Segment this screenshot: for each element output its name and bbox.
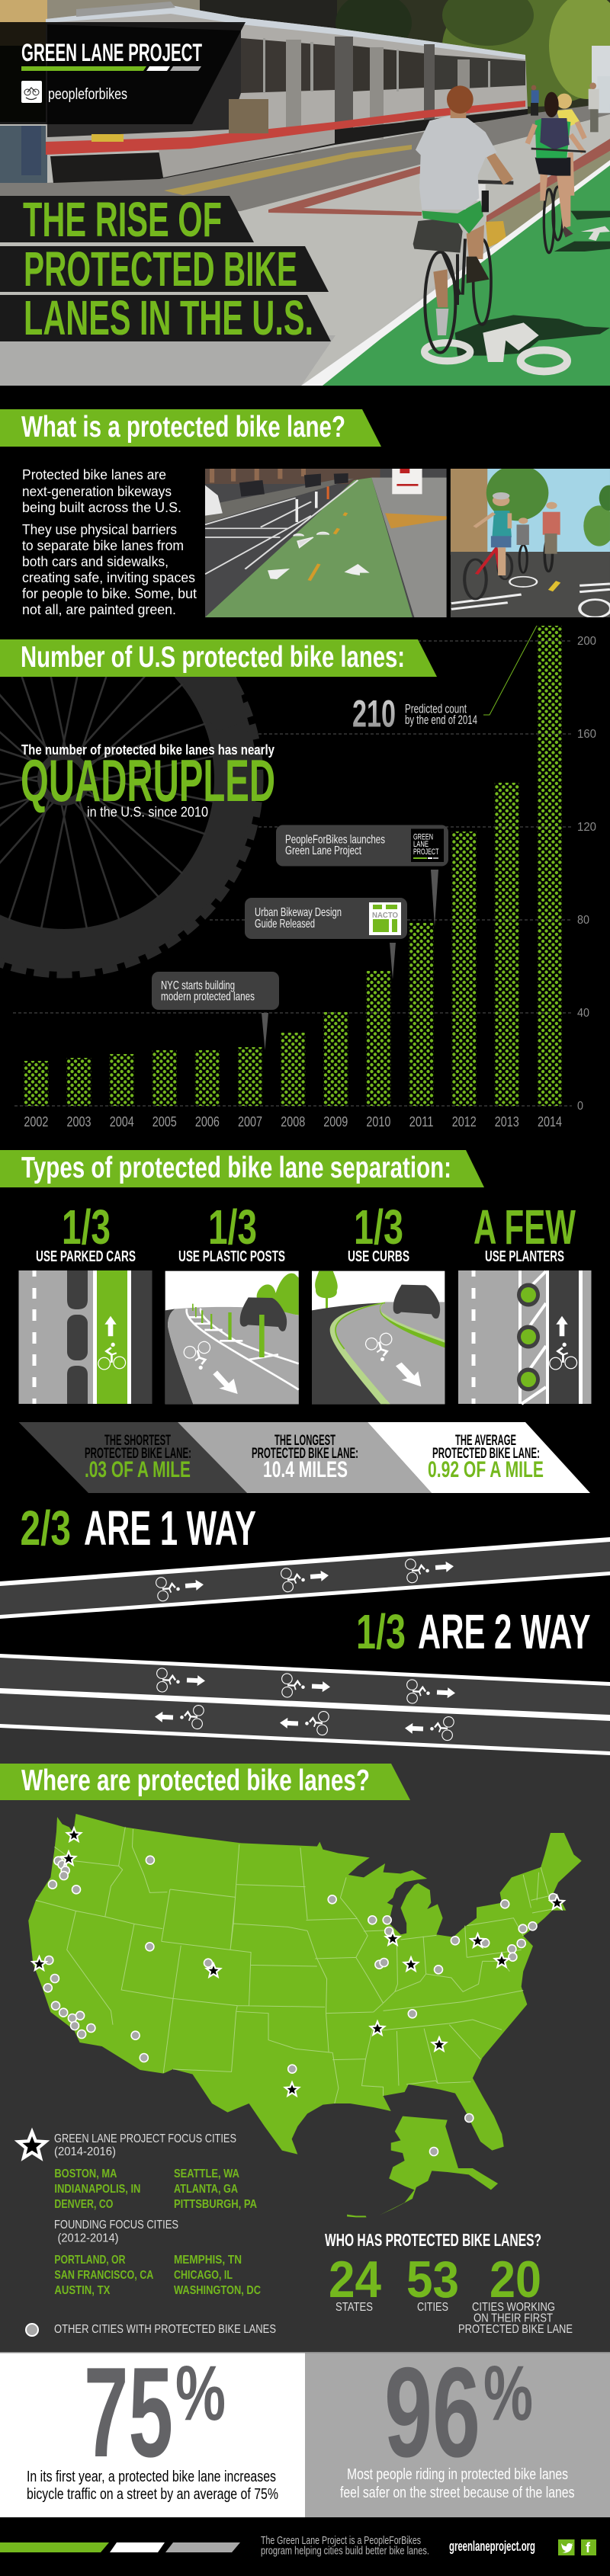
axis labels: 80 bbox=[577, 914, 589, 927]
photo: family riding bbox=[451, 465, 610, 617]
stat: curbs: 1/3 bbox=[354, 1200, 403, 1254]
text block: definition: both cars and sidewalks, bbox=[22, 553, 169, 569]
longest bbox=[178, 1422, 432, 1493]
text block: definition bbox=[22, 466, 197, 617]
stat: 20 cities working: ON THEIR FIRST bbox=[474, 2312, 553, 2324]
icon: Green Lane Project mini logo: PROJECT bbox=[413, 847, 439, 857]
text: quadrupled bbox=[21, 742, 275, 820]
legend heading: 2012-2014: FOUNDING FOCUS CITIES bbox=[54, 2219, 178, 2232]
heading: types of separation: Types of protected bike lane separation: bbox=[21, 1152, 451, 1184]
callout: 210 predicted bbox=[352, 626, 537, 735]
panel: 75 percent: % bbox=[175, 2350, 226, 2437]
callout: Urban Bikeway Design Guide: Urban Bikeway Design bbox=[255, 906, 342, 919]
stat: 20 cities working bbox=[458, 2251, 573, 2336]
stat: 20 cities working: 20 bbox=[490, 2251, 541, 2308]
axis labels: 40 bbox=[577, 1007, 589, 1020]
year labels: 2002 bbox=[24, 1114, 48, 1129]
city list: 2014-2016: BOSTON, MA bbox=[54, 2167, 117, 2180]
city list: 2012-2014: SAN FRANCISCO, CA bbox=[54, 2269, 154, 2282]
shortest: .03 OF A MILE bbox=[85, 1457, 191, 1482]
icon: NACTO logo bbox=[369, 902, 401, 935]
city list: 2012-2014: MEMPHIS, TN bbox=[174, 2254, 242, 2267]
callout: NYC starts building: modern protected lanes bbox=[161, 991, 255, 1003]
stat: plastic posts bbox=[178, 1200, 285, 1265]
callout: Green Lane Project launch bbox=[276, 825, 448, 927]
footer text: program helping cities build better bike lanes. bbox=[261, 2544, 429, 2558]
footer bbox=[0, 2517, 610, 2576]
thin rule above stat panels bbox=[0, 2352, 610, 2353]
panel: 96 percent: 96 bbox=[384, 2341, 480, 2484]
stat: parked cars: 1/3 bbox=[62, 1200, 111, 1254]
stat: 20 cities working: CITIES WORKING bbox=[472, 2301, 555, 2314]
text block: definition: being built across the U.S. bbox=[22, 499, 181, 515]
heading: what is a protected bike lane: What is a protected bike lane? bbox=[21, 411, 345, 444]
icon: NACTO logo: NACTO bbox=[372, 912, 398, 920]
year labels: 2007 bbox=[238, 1114, 262, 1129]
heading: 2/3 are 1 way: 2/3 bbox=[20, 1501, 71, 1556]
shortest: THE SHORTEST bbox=[104, 1433, 171, 1449]
longest: 10.4 MILES bbox=[263, 1457, 348, 1482]
bars bbox=[24, 626, 562, 1106]
icon: PeopleForBikes bbox=[21, 81, 42, 103]
city list: 2012-2014: CHICAGO, IL bbox=[174, 2269, 233, 2282]
text block: definition: creating safe, inviting spaces bbox=[22, 569, 195, 585]
city list: 2014-2016: DENVER, CO bbox=[54, 2198, 113, 2211]
hero photo: light-rail train and cyclists on a green lane bbox=[0, 0, 610, 386]
road: one-way lane bbox=[0, 1537, 610, 1619]
stat: 53 cities: CITIES bbox=[417, 2301, 448, 2314]
title: PROTECTED BIKE bbox=[24, 242, 297, 296]
city list: 2012-2014 bbox=[54, 2254, 261, 2297]
title: LANES IN THE U.S. bbox=[24, 290, 313, 345]
year labels: 2008 bbox=[281, 1114, 305, 1129]
callout: 210 predicted: by the end of 2014 bbox=[405, 713, 477, 727]
stat: 53 cities: 53 bbox=[406, 2251, 459, 2308]
illustration: parked car separation bbox=[18, 1270, 152, 1404]
illustration: curb separation bbox=[312, 1271, 445, 1404]
city list: 2014-2016 bbox=[54, 2167, 257, 2211]
year labels: 2013 bbox=[495, 1114, 519, 1129]
legend heading: 2014-2016 bbox=[54, 2132, 236, 2158]
panel: 75 percent bbox=[0, 2341, 305, 2517]
logo stripe bbox=[21, 66, 201, 71]
state borders bbox=[36, 1827, 552, 2103]
axis labels bbox=[577, 635, 596, 1113]
footer text bbox=[261, 2534, 429, 2558]
heading: 1/3 are 2 way bbox=[356, 1604, 590, 1659]
average bbox=[368, 1422, 590, 1493]
map: United States bbox=[28, 1814, 582, 2217]
stat: curbs: USE CURBS bbox=[348, 1248, 409, 1265]
icon: Green Lane Project mini logo: LANE bbox=[413, 840, 429, 849]
longest: PROTECTED BIKE LANE: bbox=[252, 1446, 358, 1462]
markers: other cities bbox=[43, 1856, 557, 2155]
icon: facebook bbox=[581, 2539, 596, 2555]
stat: 24 states: STATES bbox=[336, 2301, 373, 2314]
far riders bbox=[598, 103, 610, 113]
axis labels: 200 bbox=[577, 635, 596, 648]
contiguous states bbox=[28, 1814, 582, 2155]
illustration: plastic post separation bbox=[165, 1271, 299, 1404]
Alaska bbox=[347, 2116, 498, 2217]
text: quadrupled: in the U.S. since 2010 bbox=[87, 805, 208, 820]
stat: planters: USE PLANTERS bbox=[485, 1248, 564, 1265]
map section background bbox=[0, 1725, 610, 2353]
axis labels: 0 bbox=[577, 1100, 583, 1113]
wheel graphic behind chart bbox=[0, 677, 264, 979]
city list: 2012-2014: WASHINGTON, DC bbox=[174, 2284, 261, 2297]
text block: definition: for people to bike. Some, but bbox=[22, 585, 197, 601]
city list: 2014-2016: INDIANAPOLIS, IN bbox=[54, 2183, 140, 2196]
stat: plastic posts: USE PLASTIC POSTS bbox=[178, 1248, 285, 1265]
icon: star bbox=[18, 2132, 46, 2158]
legend: other cities: OTHER CITIES WITH PROTECTED BIKE LANES bbox=[54, 2323, 276, 2336]
city list: 2014-2016: PITTSBURGH, PA bbox=[174, 2198, 257, 2211]
riders bbox=[544, 539, 552, 572]
panel: 96 percent: % bbox=[483, 2350, 533, 2437]
callout: NYC starts building: NYC starts building bbox=[161, 979, 235, 992]
icon: facebook: f bbox=[586, 2540, 591, 2555]
text block: definition: to separate bike lanes from bbox=[22, 537, 184, 553]
heading: 1/3 are 2 way: 1/3 bbox=[356, 1604, 406, 1659]
icon: twitter bbox=[558, 2539, 575, 2555]
bar chart: number of protected bike lanes by year bbox=[13, 626, 596, 1129]
footer url: greenlaneproject.org bbox=[449, 2539, 535, 2554]
wordmark: peopleforbikes: peopleforbikes bbox=[48, 86, 127, 103]
stats: who has protected bike lanes bbox=[325, 2230, 573, 2336]
city list: 2014-2016: SEATTLE, WA bbox=[174, 2167, 239, 2180]
footer text: The Green Lane Project is a PeopleForBikes bbox=[261, 2534, 421, 2547]
title bbox=[0, 192, 331, 345]
text: quadrupled: The number of protected bike lanes has nearly bbox=[21, 742, 274, 758]
average: 0.92 OF A MILE bbox=[428, 1457, 544, 1482]
stat: parked cars bbox=[36, 1200, 136, 1265]
heading: number of protected bike lanes: Number of U.S protected bike lanes: bbox=[21, 641, 405, 674]
callout: 210 predicted: Predicted count bbox=[405, 701, 467, 716]
stat: curbs bbox=[348, 1200, 409, 1265]
callout: Green Lane Project launch: Green Lane Project bbox=[285, 844, 361, 857]
callout: NYC starts building bbox=[152, 972, 279, 1050]
road: two-way lane bbox=[0, 1654, 610, 1755]
year labels: 2011 bbox=[409, 1114, 434, 1129]
stat: planters bbox=[474, 1200, 576, 1265]
logo: Green Lane Project: GREEN LANE PROJECT bbox=[21, 39, 202, 66]
shortest: PROTECTED BIKE LANE: bbox=[85, 1446, 191, 1462]
year labels: 2006 bbox=[195, 1114, 220, 1129]
city list: 2014-2016: ATLANTA, GA bbox=[174, 2183, 238, 2196]
legend heading: 2012-2014: (2012-2014) bbox=[58, 2232, 119, 2245]
stat band: lane lengths bbox=[18, 1422, 590, 1493]
main rider bbox=[474, 239, 491, 325]
panel: 75 percent: 75 bbox=[84, 2341, 173, 2484]
stat: plastic posts: 1/3 bbox=[208, 1200, 257, 1254]
legend heading: 2012-2014 bbox=[54, 2219, 178, 2245]
year labels: 2003 bbox=[67, 1114, 92, 1129]
text block: definition: Protected bike lanes are bbox=[22, 466, 166, 482]
legend heading: 2014-2016: GREEN LANE PROJECT FOCUS CITIES bbox=[54, 2132, 236, 2145]
text block: definition: next-generation bikeways bbox=[22, 483, 172, 499]
text: quadrupled: QUADRUPLED bbox=[21, 747, 275, 814]
title: THE RISE OF bbox=[23, 192, 222, 247]
year labels: 2012 bbox=[452, 1114, 477, 1129]
axis labels: 120 bbox=[577, 821, 596, 834]
city list: 2012-2014: AUSTIN, TX bbox=[54, 2284, 111, 2297]
callout: Urban Bikeway Design Guide: Guide Released bbox=[255, 918, 315, 931]
callout: Green Lane Project launch: PeopleForBikes launches bbox=[285, 834, 385, 846]
stat: 20 cities working: PROTECTED BIKE LANE bbox=[458, 2323, 573, 2336]
text block: definition: They use physical barriers bbox=[22, 521, 177, 537]
panel: 75 percent: bicycle traffic on a street by an average of 75% bbox=[27, 2486, 278, 2503]
photo: green protected lane bbox=[205, 469, 447, 617]
panel: 75 percent: In its first year, a protected bike lane increases bbox=[27, 2469, 276, 2485]
legend: focus cities bbox=[18, 2132, 261, 2297]
heading: 2/3 are 1 way: ARE 1 WAY bbox=[84, 1501, 256, 1556]
longest: THE LONGEST bbox=[274, 1433, 336, 1449]
year labels: 2009 bbox=[323, 1114, 348, 1129]
stat: 24 states: 24 bbox=[329, 2251, 381, 2308]
icon: Green Lane Project mini logo: GREEN bbox=[413, 832, 433, 841]
heading: 2/3 are 1 way bbox=[20, 1501, 256, 1556]
logo panel bbox=[0, 22, 246, 124]
year labels: 2010 bbox=[366, 1114, 390, 1129]
legend heading: 2014-2016: (2014-2016) bbox=[54, 2145, 116, 2158]
text block: definition: not all, are painted green. bbox=[22, 601, 176, 617]
city list: 2012-2014: PORTLAND, OR bbox=[54, 2254, 126, 2267]
lane shadows and painted bike symbol bbox=[455, 315, 610, 356]
footer stripes bbox=[0, 2542, 240, 2552]
shortest bbox=[18, 1422, 247, 1493]
average: PROTECTED BIKE LANE: bbox=[432, 1446, 540, 1462]
markers: focus cities bbox=[32, 1828, 564, 2096]
year labels: 2014 bbox=[538, 1114, 562, 1129]
year labels: 2004 bbox=[110, 1114, 134, 1129]
stat: parked cars: USE PARKED CARS bbox=[36, 1248, 136, 1265]
average: THE AVERAGE bbox=[455, 1433, 516, 1449]
callout: Urban Bikeway Design Guide bbox=[245, 898, 407, 979]
axis labels: 160 bbox=[577, 728, 596, 741]
heading: where are protected bike lanes: Where are protected bike lanes? bbox=[21, 1764, 370, 1797]
icon: Green Lane Project mini logo bbox=[411, 829, 444, 862]
illustration: planter separation bbox=[458, 1270, 592, 1404]
year labels bbox=[24, 1114, 562, 1129]
year labels: 2005 bbox=[152, 1114, 177, 1129]
callout: 210 predicted: 210 bbox=[352, 692, 396, 735]
panel: 96 percent bbox=[305, 2341, 610, 2517]
